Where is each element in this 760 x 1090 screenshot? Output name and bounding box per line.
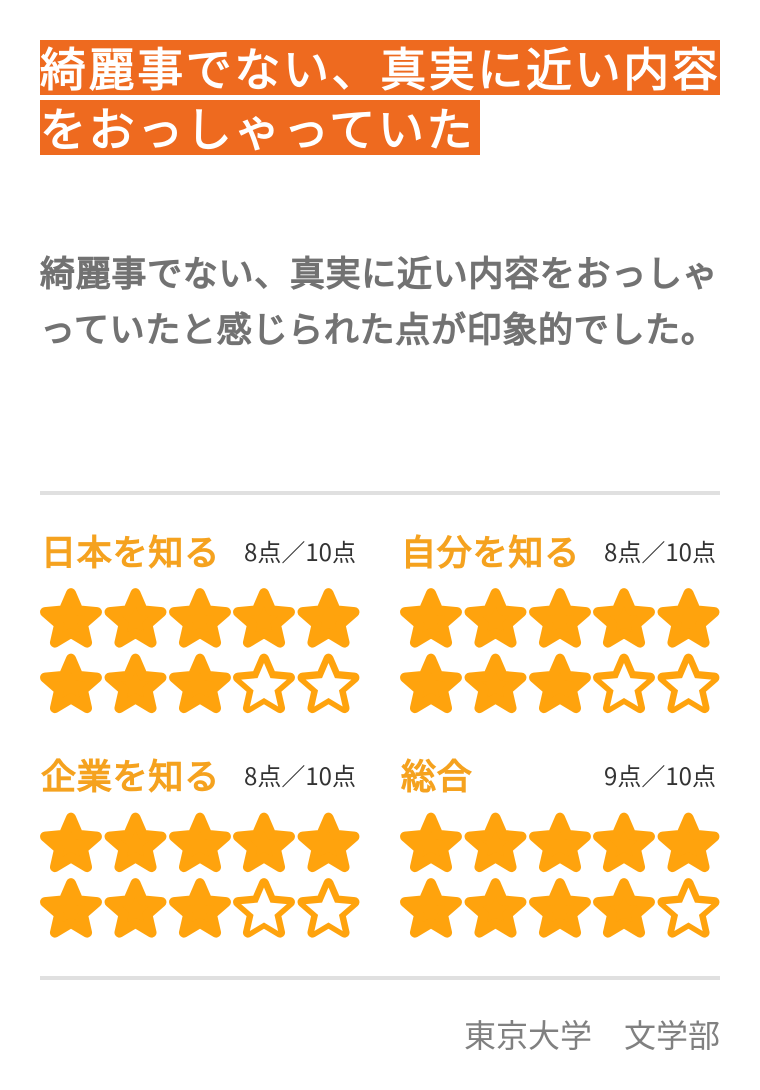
stars: 総合 9 of 10: [405, 818, 714, 933]
body text: [40, 246, 718, 353]
score: 企業を知る: 8点／10点: [244, 757, 356, 792]
stars: 日本を知る 8 of 10: [45, 593, 354, 708]
score: 総合: 9点／10点: [604, 757, 716, 792]
stars: 自分を知る 8 of 10: [405, 593, 714, 708]
score: 日本を知る: 8点／10点: [244, 533, 356, 568]
label: 総合: 総合: [401, 749, 473, 800]
label: 日本を知る: 日本を知る: [41, 525, 220, 576]
title: [40, 40, 720, 155]
stars: 企業を知る 8 of 10: [45, 818, 354, 933]
body text: っていたと感じられた点が印象的でした。: [40, 302, 717, 353]
body text: 綺麗事でない、真実に近い内容をおっしゃ: [40, 246, 718, 297]
label: 自分を知る: 自分を知る: [401, 525, 580, 576]
label: 企業を知る: 企業を知る: [41, 749, 220, 800]
footer: university and faculty: 東京大学 文学部: [464, 1011, 720, 1057]
score: 自分を知る: 8点／10点: [604, 533, 716, 568]
